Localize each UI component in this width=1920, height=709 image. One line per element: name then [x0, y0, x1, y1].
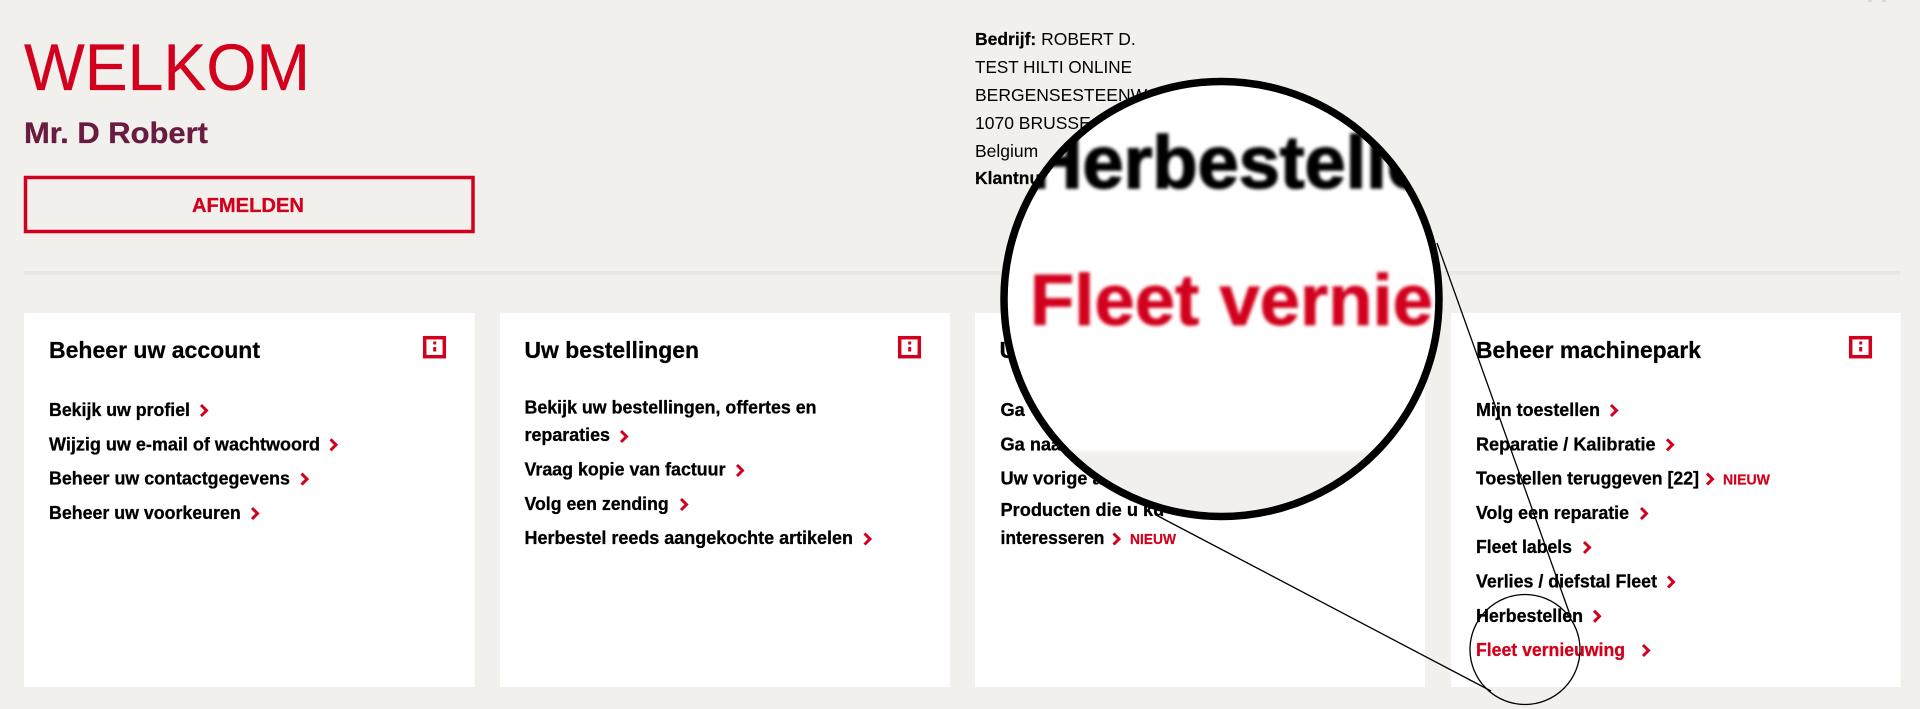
link: producten: interesseren: [1000, 528, 1104, 548]
title: welkom: WELKOM: [24, 30, 310, 104]
icon: info: [1851, 338, 1870, 357]
link: reparatie kalibratie: Reparatie / Kalibratie: [1476, 434, 1656, 454]
link: contactgegevens: Beheer uw contactgegevens: [49, 469, 290, 489]
lens content: [1008, 85, 1436, 513]
user name: Mr. D Robert: [24, 117, 208, 150]
link: toestellen teruggeven: NIEUW: [1723, 473, 1770, 489]
link: producten: Producten die u ku: [1000, 500, 1164, 520]
link: toestellen teruggeven: Toestellen teruggeven [22]: [1476, 469, 1699, 489]
magnifier: enlarged view: [1000, 78, 1443, 520]
link: herbestellen: Herbestellen: [1476, 606, 1583, 626]
company address block: BERGENSESTEENW: [975, 85, 1148, 105]
link: fleet labels: Fleet labels: [1476, 537, 1572, 557]
button: afmelden: [26, 178, 473, 232]
panel: beheer uw account: [24, 313, 474, 687]
lens ring: [1004, 82, 1439, 516]
link: zending: Volg een zending: [524, 494, 669, 514]
link fragment: Ga naar: [1000, 434, 1068, 454]
magnifier connector lines: [1156, 243, 1569, 691]
enlarged text: herbestellen: Herbestelle: [1029, 121, 1428, 204]
link: herbestel: Herbestel reeds aangekochte artikelen: [524, 528, 853, 548]
button: afmelden: AFMELDEN: [192, 195, 304, 217]
company address block: [975, 29, 1148, 188]
small marks at top right: [1868, 0, 1886, 2]
link: factuur: Vraag kopie van factuur: [524, 460, 726, 480]
link fragment: Uw vorige a: [1000, 469, 1103, 489]
link: fleet vernieuwing: Fleet vernieuwing: [1476, 640, 1625, 660]
link: producten: [1000, 500, 1176, 548]
company address block: Belgium: [975, 141, 1038, 161]
link: bestellingen, offertes en reparaties: reparaties: [524, 425, 610, 445]
company address block: Bedrijf: ROBERT D.: [975, 29, 1136, 49]
heading: Uw bestellingen: [524, 337, 699, 363]
heading: Beheer machinepark: [1476, 337, 1702, 363]
link: bestellingen, offertes en reparaties: Bekijk uw bestellingen, offertes en: [524, 398, 816, 418]
company address block: Klantnu: [975, 168, 1040, 188]
panel: uw bestellingen: [500, 313, 950, 687]
heading: Beheer uw account: [49, 337, 260, 363]
icon: info: [425, 338, 444, 357]
link: producten: NIEUW: [1130, 532, 1176, 548]
link: verlies diefstal: Verlies / diefstal Fleet: [1476, 572, 1657, 592]
company address block: 1070 BRUSSE: [975, 113, 1091, 133]
link: wachtwoord: Wijzig uw e-mail of wachtwoord: [49, 434, 320, 454]
enlarged text: fleet vernieuwing: Fleet vernieu: [1030, 260, 1477, 341]
link: volg een reparatie: Volg een reparatie: [1476, 503, 1629, 523]
panel: beheer machinepark: [1451, 313, 1900, 687]
small magnifier focus circle: [1470, 594, 1580, 704]
company address block: TEST HILTI ONLINE: [975, 57, 1132, 77]
link: voorkeuren: Beheer uw voorkeuren: [49, 503, 241, 523]
panel: third card partly covered by magnifier: [975, 313, 1425, 687]
icon: info: [900, 338, 919, 357]
link fragment: Ga: [1000, 400, 1026, 420]
link: bestellingen, offertes en reparaties: [524, 398, 816, 445]
heading fragment: U: [1000, 337, 1016, 363]
link: mijn toestellen: Mijn toestellen: [1476, 400, 1600, 420]
link: profiel: Bekijk uw profiel: [49, 400, 190, 420]
